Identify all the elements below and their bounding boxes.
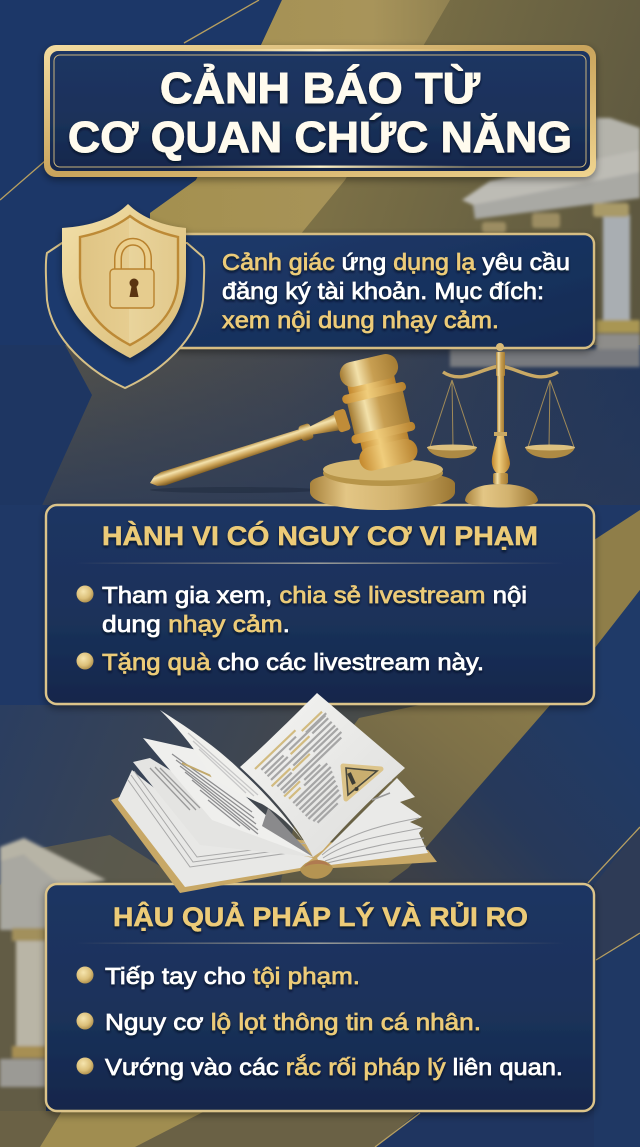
warning text: xem nội dung nhạy cảm. [222,307,499,333]
icon: scales of justice [427,343,575,508]
heading: HẬU QUẢ PHÁP LÝ VÀ RỦI RO [113,900,528,932]
title text: CƠ QUAN CHỨC NĂNG [68,112,572,162]
bullet list: Vướng vào các rắc rối pháp lý liên quan. [105,1054,552,1080]
title text: CẢNH BÁO TỪ [160,63,480,113]
gavel head [334,351,423,474]
bullet list [76,582,533,675]
panel: legal consequences [46,884,594,1111]
bullet list [76,963,563,1080]
warning triangle [343,766,381,799]
icon: shield with padlock [46,204,204,388]
left page stack [118,770,313,887]
decorative courthouse, upper right [450,118,640,367]
page text lines [255,707,377,828]
bullet list: dung nhạy cảm . [102,611,289,637]
shadow in the gutter [262,808,313,857]
decorative courthouse, lower left [0,838,106,1087]
warning text: Cảnh giác ứng dụng lạ yêu cầu [222,249,562,275]
title panel [44,45,596,177]
book cover [111,795,437,893]
right page stack [317,778,428,866]
icon: open law book with warning sign [111,693,437,893]
padlock [110,242,154,308]
turning page [160,710,313,857]
bullet list: Nguy cơ lộ lọt thông tin cá nhân. [105,1009,449,1035]
title text [68,63,572,162]
divider [75,562,565,564]
bullet list: Tiếp tay cho tội phạm. [105,963,348,989]
divider [75,942,565,944]
panel: risky behaviours [46,505,594,704]
sound block [310,458,455,510]
bullet list: Tặng quà cho các livestream này. [102,649,456,675]
spine [300,860,333,879]
panel: warning about strange apps [170,234,594,348]
right top page [240,693,405,857]
bullet list: Tham gia xem, chia sẻ livestream nội [102,582,523,608]
icon: gavel [147,351,455,510]
warning text: đăng ký tài khoản. Mục đích: [222,278,544,304]
heading: HÀNH VI CÓ NGUY CƠ VI PHẠM [102,520,538,551]
handle [147,408,351,493]
